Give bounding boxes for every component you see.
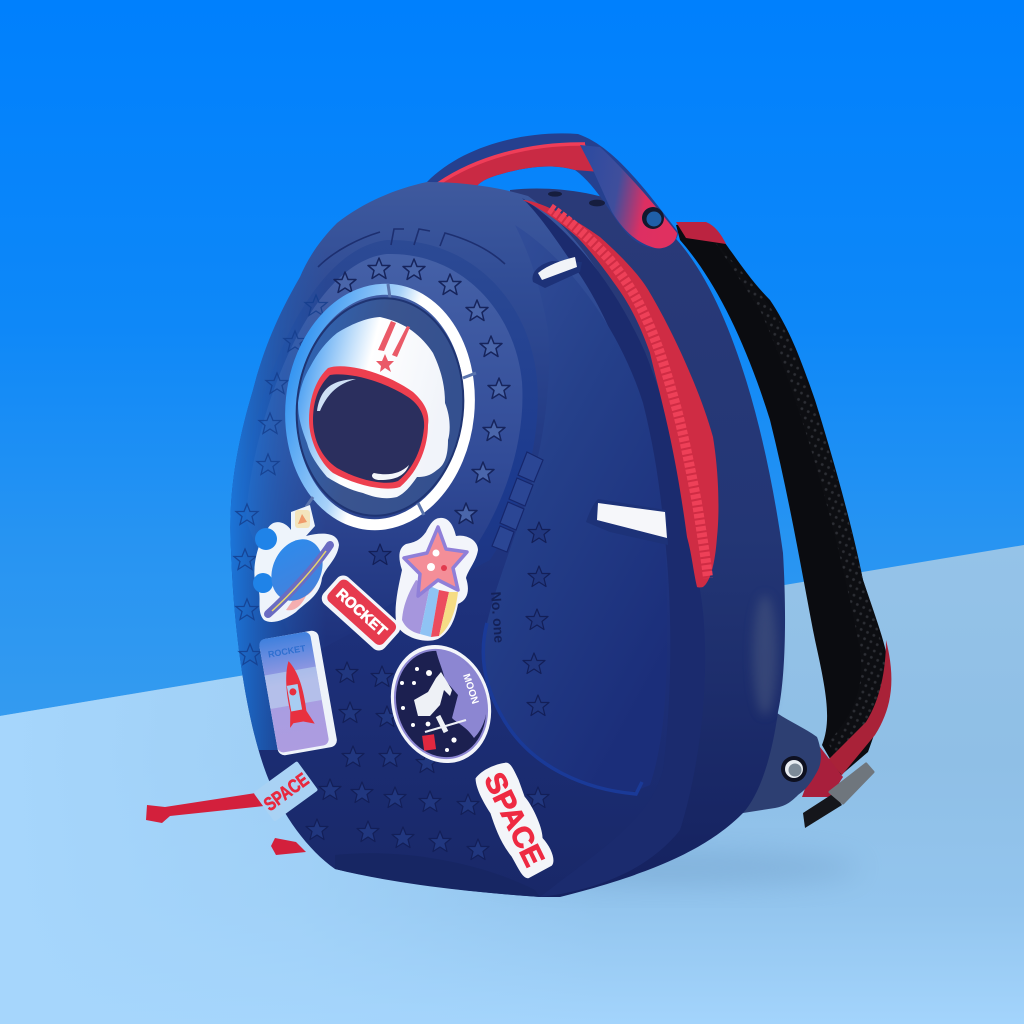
patch: white SPACE sticker bbox=[470, 758, 559, 882]
side tread ridges bbox=[492, 452, 543, 552]
floor bbox=[0, 545, 1024, 1024]
white slit upper bbox=[532, 257, 582, 288]
patch: rocket card bbox=[258, 630, 338, 756]
bottom base bbox=[335, 853, 540, 897]
left edge background bleed bbox=[230, 269, 313, 750]
patch: UFO bbox=[253, 505, 339, 622]
patch: moon astronaut bbox=[376, 632, 506, 776]
rivets on top of shell bbox=[548, 191, 605, 206]
bag floor shadow bbox=[480, 850, 860, 886]
ring notches bbox=[306, 284, 476, 515]
white slit lower bbox=[586, 499, 668, 545]
embossed stars on band bbox=[334, 258, 510, 524]
patch: rocket card: ROCKET bbox=[267, 643, 307, 660]
patch: blue SPACE tag: SPACE bbox=[260, 769, 313, 816]
embossed brand mark: No. one bbox=[488, 591, 508, 644]
star band around helmet bbox=[238, 240, 538, 660]
faded stars on left side bbox=[234, 295, 327, 664]
helmet porthole bbox=[279, 280, 481, 534]
segmented ridge lines on shell top bbox=[318, 229, 505, 267]
worn streak on rear shell bbox=[753, 595, 777, 715]
helmet stripes and star bbox=[376, 321, 410, 372]
side panel with embossed groove bbox=[483, 225, 667, 793]
red zipper bbox=[523, 200, 718, 587]
floor left highlight bbox=[0, 616, 600, 1024]
front shell bbox=[230, 182, 705, 897]
rear shell bbox=[500, 188, 785, 897]
shoulder strap bbox=[676, 222, 891, 776]
helmet shell bbox=[298, 317, 450, 498]
visor bbox=[309, 366, 428, 489]
dark rim beside zipper bbox=[522, 198, 705, 897]
strap lug, red webbing and buckle bbox=[743, 713, 873, 828]
patch: shooting star bbox=[396, 518, 478, 641]
white segmented ring bbox=[279, 280, 481, 534]
patch: ROCKET label: ROCKET bbox=[333, 586, 390, 640]
patch: white SPACE sticker: SPACE bbox=[477, 768, 550, 872]
handle bbox=[427, 133, 678, 248]
inner dark ring bbox=[286, 290, 474, 524]
red pull tape left bbox=[146, 792, 306, 855]
patch: moon astronaut: MOON bbox=[460, 673, 480, 706]
embossed stars lower area bbox=[306, 522, 550, 860]
patch: ROCKET label bbox=[318, 572, 404, 654]
background wall bbox=[0, 0, 1024, 720]
